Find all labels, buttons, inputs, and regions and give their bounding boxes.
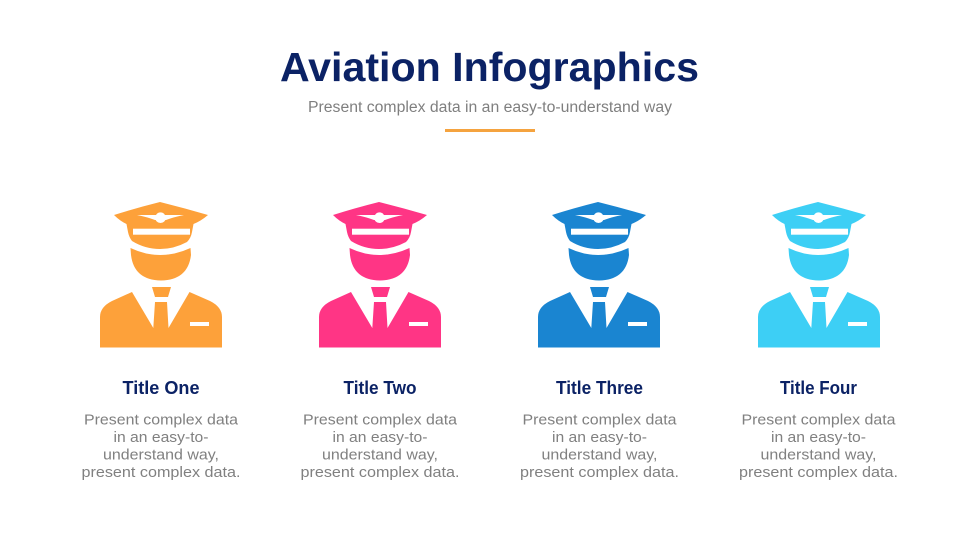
text block: column three: Present complex data (522, 412, 677, 428)
heading: title three: Title Three (556, 378, 643, 398)
text block: column one: understand way, (103, 446, 219, 464)
text block: column three: understand way, (542, 446, 658, 464)
text block: column four: in an easy-to- (771, 429, 866, 446)
text block: column three (520, 412, 679, 481)
title: Aviation Infographics (280, 44, 699, 90)
heading: title one: Title One (122, 378, 200, 398)
text block: column two: present complex data. (300, 464, 460, 481)
text block: column one: present complex data. (82, 464, 240, 481)
text block: column three: in an easy-to- (552, 429, 647, 446)
heading: title two: Title Two (344, 378, 416, 398)
text block: column two: understand way, (322, 446, 438, 464)
icon: cyan pilot (758, 202, 880, 348)
text block: column two: in an easy-to- (332, 429, 428, 446)
text block: column one (82, 412, 240, 481)
text block: column two (300, 412, 460, 481)
title underline (445, 129, 535, 132)
text block: column one: in an easy-to- (114, 429, 208, 446)
text block: column four: Present complex data (742, 412, 896, 428)
text block: column three: present complex data. (520, 464, 679, 481)
text block: column four (739, 412, 898, 481)
heading: title four: Title Four (780, 378, 857, 398)
text block: column four: understand way, (760, 446, 876, 464)
text block: column one: Present complex data (84, 412, 239, 428)
icon: blue pilot (538, 202, 660, 348)
icon: orange pilot (100, 202, 222, 348)
text block: column two: Present complex data (303, 412, 458, 428)
icon: pink pilot (319, 202, 441, 348)
text block: column four: present complex data. (739, 464, 898, 481)
subtitle: Present complex data in an easy-to-understand way (308, 99, 672, 116)
